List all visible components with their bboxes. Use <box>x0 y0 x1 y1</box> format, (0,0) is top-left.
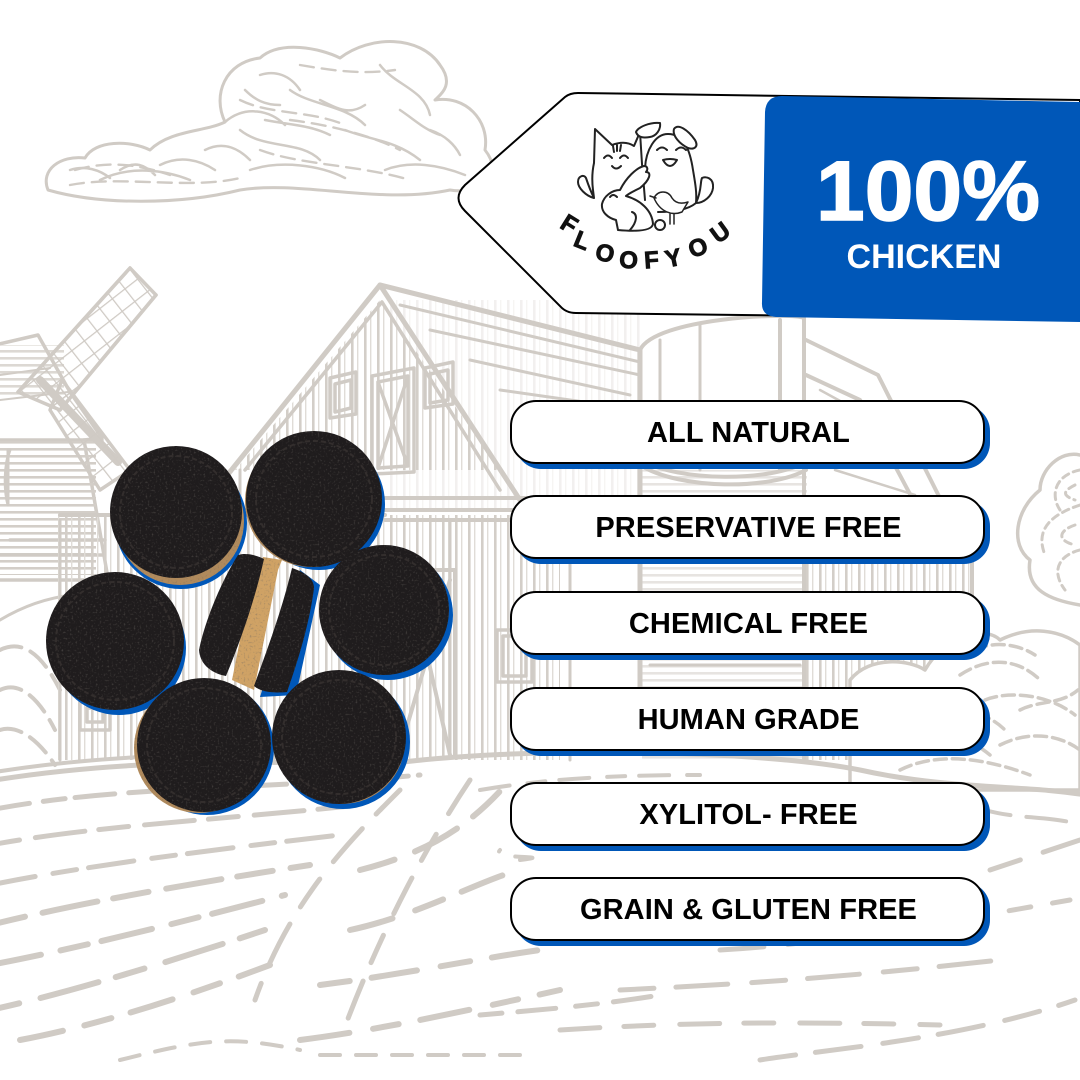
barn windows <box>330 362 453 474</box>
feature pill: grain and gluten free: GRAIN & GLUTEN FREE <box>580 894 917 926</box>
rabbit <box>602 166 653 231</box>
logo wordmark: Y <box>663 244 684 274</box>
blue shadow shapes <box>52 438 453 815</box>
treat: top left <box>110 446 242 578</box>
treat: centre sandwich side view <box>199 554 314 692</box>
feature pill: chemical free <box>510 591 990 660</box>
barn sketch <box>55 285 640 760</box>
feature pill: xylitol free <box>510 782 990 851</box>
feature pill: all natural <box>510 400 990 469</box>
silo sketch <box>640 316 807 760</box>
bushes sketch <box>850 454 1080 790</box>
treat: bottom left <box>137 678 271 812</box>
logo: cat, dog, rabbit and bird line art <box>578 123 713 231</box>
feature pill: chemical free: CHEMICAL FREE <box>629 608 868 640</box>
logo wordmark: O <box>618 246 639 275</box>
side building sketch <box>805 340 972 760</box>
logo tag with blue badge <box>458 92 1080 322</box>
feature pill: preservative free: PRESERVATIVE FREE <box>595 512 902 544</box>
logo wordmark: F <box>643 247 660 274</box>
feature pill: all natural: ALL NATURAL <box>647 417 850 449</box>
dog <box>645 134 713 212</box>
treat rims <box>56 441 439 802</box>
bird <box>654 192 688 213</box>
logo wordmark: O <box>592 238 617 269</box>
cloud sketch <box>46 42 492 201</box>
white arrow tag <box>458 93 1080 319</box>
blue badge <box>762 96 1080 322</box>
fields sketch <box>0 752 1080 1060</box>
feature pill: xylitol free: XYLITOL- FREE <box>639 799 858 831</box>
logo wordmark: O <box>684 232 712 264</box>
logo wordmark: U <box>706 217 736 249</box>
treat: top right <box>246 431 382 567</box>
tan cookie edges <box>116 435 405 813</box>
treat: bottom right <box>272 670 406 804</box>
feature pill: human grade: HUMAN GRADE <box>638 704 859 736</box>
logo wordmark <box>556 209 736 275</box>
windmill sketch <box>0 268 156 765</box>
feature pill: human grade <box>510 687 990 756</box>
logo wordmark: L <box>570 226 594 256</box>
barn door <box>497 630 532 682</box>
logo wordmark: F <box>556 209 582 240</box>
treat: right <box>319 545 449 675</box>
feature pill: preservative free <box>510 495 990 564</box>
badge headline: 100% <box>816 144 1040 238</box>
badge subtitle: CHICKEN <box>847 238 1001 276</box>
treat: left <box>46 572 184 710</box>
feature pill: grain and gluten free <box>510 877 990 946</box>
cat <box>578 129 645 200</box>
